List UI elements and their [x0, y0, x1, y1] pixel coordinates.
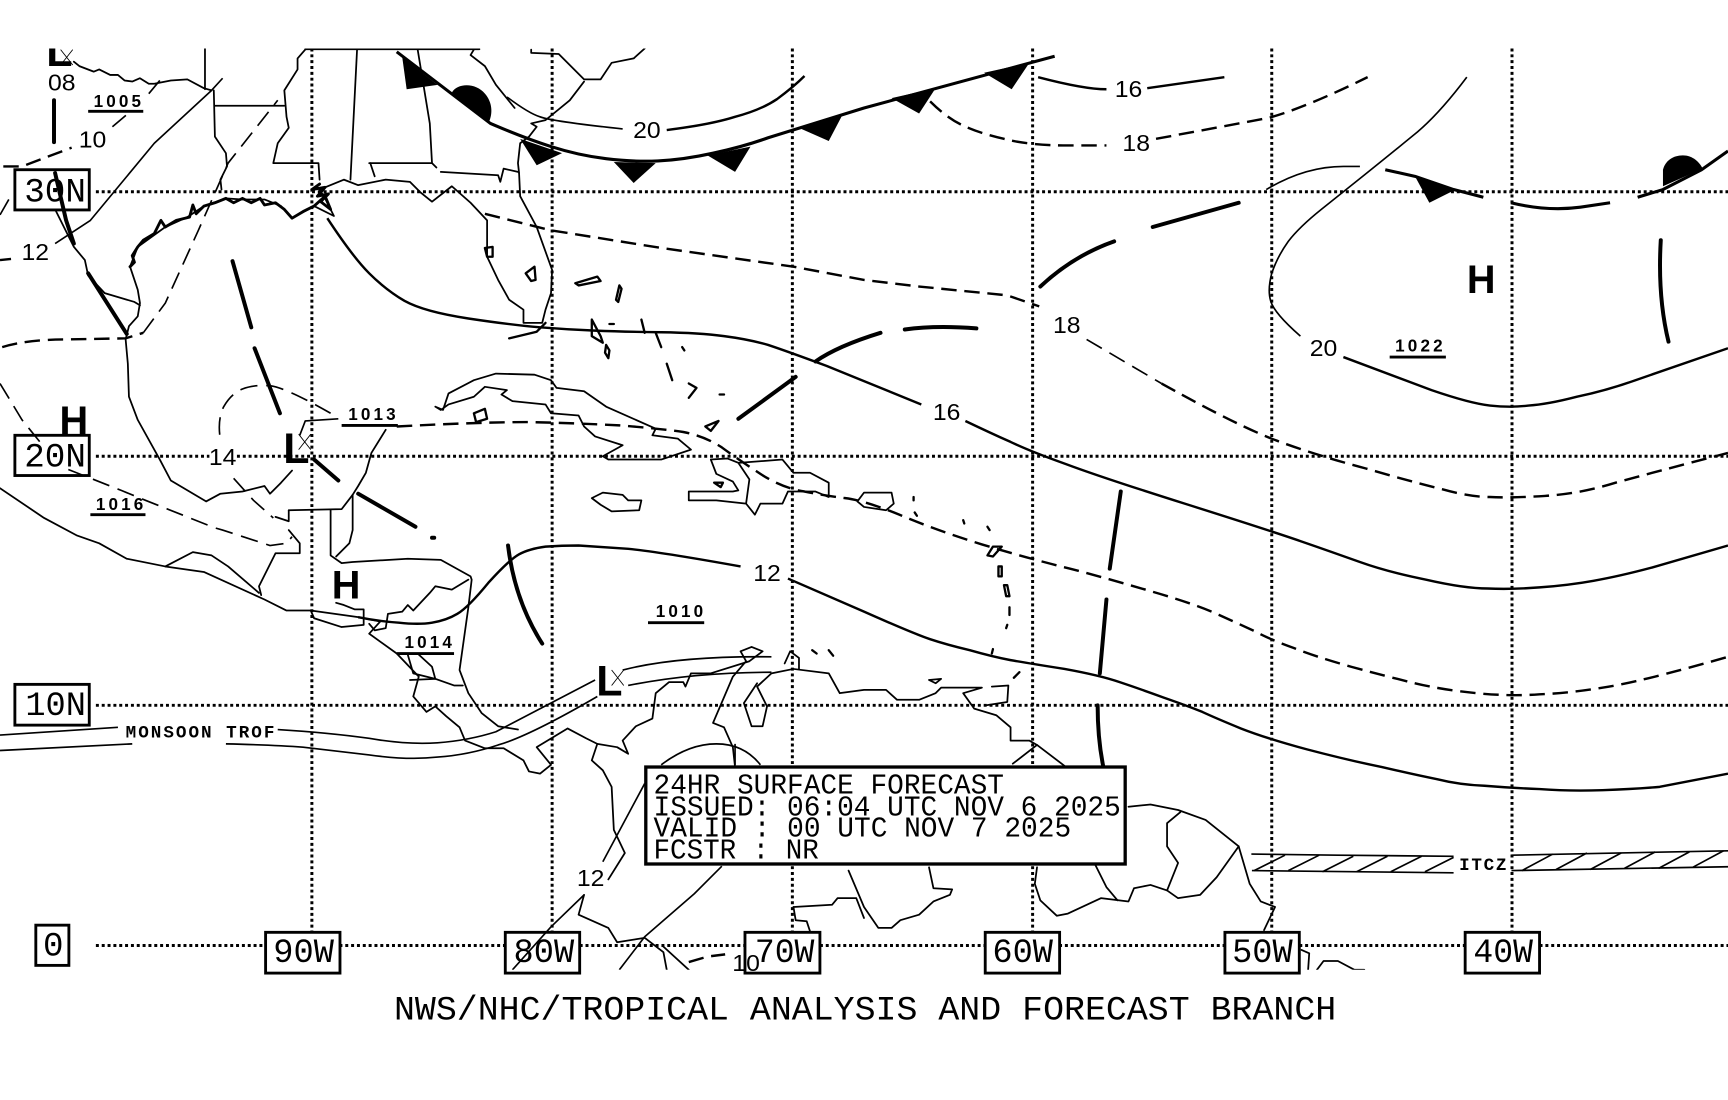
isobar value labels: 08	[48, 69, 75, 95]
high and low pressure symbols: H	[60, 399, 88, 443]
pressure center values: 1010	[656, 602, 703, 621]
high and low pressure symbols: L	[596, 657, 622, 705]
pressure center values: 1013	[348, 405, 396, 424]
latitude and longitude axis labels: 40W	[1473, 935, 1533, 973]
forecast info box: 24HR SURFACE FORECAST	[654, 769, 1004, 802]
isobar value labels: 18	[1053, 312, 1081, 338]
isobar value labels: 10	[732, 950, 760, 976]
surface troughs	[54, 100, 1668, 766]
footer credit: NWS/NHC/TROPICAL ANALYSIS AND FORECAST BRANCH	[394, 992, 1336, 1030]
isobar value labels: 12	[21, 239, 49, 265]
ITCZ band	[1251, 851, 1728, 873]
isobar value labels: 16	[933, 399, 960, 425]
frontal system north	[397, 52, 1055, 183]
pressure center values	[88, 92, 1446, 654]
small islands	[474, 247, 1019, 678]
latitude and longitude axis labels: 10N	[25, 688, 86, 726]
high and low pressure symbols: H	[332, 563, 360, 607]
latitude and longitude axis labels: 90W	[273, 935, 334, 973]
latitude and longitude axis labels: 70W	[755, 935, 815, 973]
high and low pressure symbols: L	[46, 28, 73, 76]
monsoon trough label: MONSOON TROF	[126, 723, 274, 743]
isobar value labels: 16	[1115, 76, 1142, 102]
pressure center values: 1005	[94, 92, 142, 111]
forecast info box: FCSTR : NR	[654, 834, 819, 867]
pressure center values: 1022	[1395, 337, 1443, 356]
forecast info box: ISSUED: 06:04 UTC NOV 6 2025	[654, 792, 1121, 825]
isobar value labels: 14	[209, 444, 237, 470]
isobar value labels: 12	[753, 560, 781, 586]
isobar value labels: 10	[79, 127, 106, 153]
latitude and longitude axis labels: 60W	[992, 935, 1053, 973]
high and low pressure symbols: H	[1467, 258, 1495, 302]
forecast info box: VALID : 00 UTC NOV 7 2025	[654, 812, 1071, 845]
ITCZ label: ITCZ	[1459, 856, 1506, 876]
lat/lon dotted grid	[96, 48, 1728, 946]
isobar value labels: 12	[577, 865, 604, 891]
frontal system northeast	[1385, 151, 1728, 209]
isobar value labels: 18	[1122, 130, 1150, 156]
latitude and longitude axis labels: 80W	[514, 935, 575, 973]
high and low pressure symbols	[46, 28, 1495, 705]
isobar value labels	[21, 69, 1337, 976]
pressure center values: 1016	[96, 495, 143, 514]
latitude and longitude axis labels: 50W	[1232, 935, 1293, 973]
monsoon trough lines	[0, 657, 771, 758]
high and low pressure symbols: L	[283, 425, 309, 473]
pressure center values: 1014	[404, 633, 452, 652]
coastlines and borders map	[0, 48, 1364, 970]
latitude and longitude axis labels: 30N	[24, 175, 86, 213]
forecast info box	[646, 767, 1125, 867]
latitude and longitude axis labels: 20N	[24, 440, 86, 478]
latitude and longitude axis labels: 0	[43, 928, 63, 966]
isobar value labels: 20	[633, 117, 661, 143]
isobar value labels: 20	[1310, 335, 1337, 361]
latitude and longitude axis labels	[15, 170, 1540, 973]
Texas Louisiana rough coast	[130, 184, 331, 267]
